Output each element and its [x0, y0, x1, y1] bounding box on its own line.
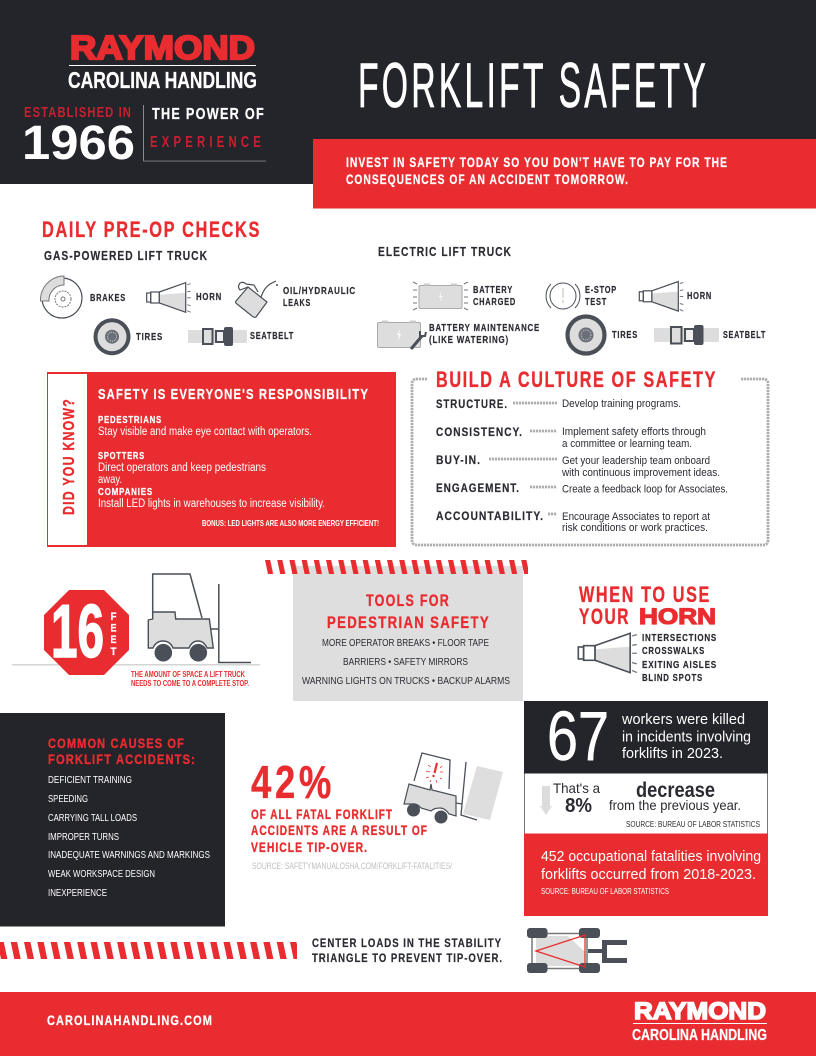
- block: 67 workers: 67: [547, 697, 609, 775]
- label: e-stop test: [585, 285, 617, 308]
- panel: did you know: [48, 372, 396, 546]
- icon: oil can: [236, 281, 278, 317]
- caption: stopping distance: NEEDS TO COME TO A COMPLETE STOP.: [131, 679, 249, 688]
- stopping distance graphic: [12, 574, 260, 688]
- list: horn situations: CROSSWALKS: [642, 646, 705, 657]
- banner: invest in safety: [313, 139, 816, 208]
- list: causes: INADEQUATE WARNINGS AND MARKINGS: [48, 850, 210, 861]
- block: 67 workers: forklifts in 2023.: [622, 746, 723, 762]
- stop sign: 16 feet: E: [110, 622, 116, 634]
- list: causes: IMPROPER TURNS: [48, 832, 119, 843]
- established in 1966 badge: THE POWER OF: [152, 106, 265, 123]
- hazard stripes top: [265, 560, 528, 574]
- label: oil/hydraulic leaks: OIL/HYDRAULIC: [283, 286, 356, 297]
- block: 67 workers: [524, 697, 768, 775]
- row: structure: Develop training programs.: [562, 398, 681, 410]
- footer logo: CAROLINA HANDLING: [632, 1027, 767, 1044]
- list: tools: BARRIERS • SAFETY MIRRORS: [343, 657, 468, 668]
- icon: horn: [578, 633, 637, 673]
- heading: common causes: [48, 736, 196, 767]
- icon: e-stop: [546, 283, 580, 309]
- chain border: [412, 379, 768, 545]
- established in 1966 badge: ESTABLISHED IN: [24, 105, 132, 121]
- text: tip-over statement: VEHICLE TIP-OVER.: [251, 840, 368, 855]
- number: 42%: 42%: [251, 756, 335, 808]
- row: engagement: ENGAGEMENT.: [436, 481, 520, 495]
- label: battery maintenance: BATTERY MAINTENANCE: [429, 323, 540, 334]
- row: buy-in: with continuous improvement ideas.: [561, 467, 720, 479]
- row: consistency: Implement safety efforts through: [562, 426, 706, 438]
- panel: when to use your horn: [578, 582, 717, 684]
- text: spotters: Direct operators and keep pedestrians: [98, 462, 266, 474]
- footer logo: RAYMOND: [634, 998, 766, 1025]
- heading: common causes: COMMON CAUSES OF: [48, 736, 185, 751]
- list: causes: [48, 775, 210, 899]
- row: engagement: [436, 481, 728, 496]
- text: spotters: away.: [98, 474, 122, 486]
- caption: stopping distance: [131, 670, 249, 688]
- label: horn: HORN: [687, 291, 712, 302]
- row: consistency: CONSISTENCY.: [436, 425, 523, 439]
- label: brakes: BRAKES: [90, 293, 126, 304]
- list: causes: WEAK WORKSPACE DESIGN: [48, 869, 155, 880]
- footer url: CAROLINAHANDLING.COM: [47, 1013, 213, 1028]
- heading: tools: TOOLS FOR: [366, 591, 450, 610]
- row: buy-in: [436, 453, 720, 479]
- list: horn situations: [642, 633, 717, 684]
- footer: [0, 992, 816, 1056]
- stat: 42 percent tip-over: [251, 753, 503, 871]
- established in 1966 badge: EXPERIENCE: [150, 134, 265, 151]
- icon: forklift: [148, 574, 251, 662]
- list: causes: DEFICIENT TRAINING: [48, 775, 132, 786]
- label: horn: HORN: [196, 292, 222, 303]
- text: center loads: CENTER LOADS IN THE STABILITY: [312, 938, 502, 950]
- heading: build a culture: BUILD A CULTURE OF SAFETY: [436, 367, 717, 392]
- heading: when to use your horn: WHEN TO USE: [579, 582, 711, 607]
- list: horn situations: INTERSECTIONS: [642, 633, 717, 644]
- established in 1966 badge: [22, 105, 266, 170]
- label: battery maintenance: [429, 323, 540, 346]
- row: accountability: [436, 509, 710, 534]
- text: center loads: [312, 938, 503, 965]
- label: battery charged: [473, 285, 516, 308]
- icon: stability triangle: [527, 928, 627, 973]
- subheading: electric: ELECTRIC LIFT TRUCK: [378, 244, 512, 259]
- icon: tipping forklift: [404, 753, 503, 824]
- heading: when to use your horn: [579, 582, 716, 629]
- label: oil/hydraulic leaks: [283, 286, 356, 309]
- row: accountability: ACCOUNTABILITY.: [436, 509, 544, 523]
- list: causes: CARRYING TALL LOADS: [48, 813, 137, 824]
- list: tools: [302, 638, 510, 687]
- source: SOURCE: SAFETYMANUALOSHA.COM/FORKLIFT-FATALITIES/: [252, 861, 452, 871]
- header background: [0, 0, 816, 184]
- block: 8 percent decrease: That's a: [553, 780, 600, 796]
- list: causes: INEXPERIENCE: [48, 888, 107, 899]
- row: consistency: [436, 425, 706, 450]
- caption: stopping distance: THE AMOUNT OF SPACE A LIFT TRUCK: [131, 670, 245, 679]
- heading: tools: [327, 591, 490, 632]
- footer logo: [632, 998, 767, 1044]
- heading: common causes: FORKLIFT ACCIDENTS:: [48, 752, 196, 767]
- text: pedestrians: PEDESTRIANS: [98, 414, 162, 426]
- list: tools: MORE OPERATOR BREAKS • FLOOR TAPE: [322, 638, 489, 649]
- established in 1966 badge: 1966: [22, 117, 135, 170]
- heading: safety is everyone's responsibility: SAFETY IS EVERYONE'S RESPONSIBILITY: [98, 387, 369, 403]
- panel: tools for pedestrian safety: [293, 566, 523, 701]
- logo: Raymond Carolina Handling: [68, 30, 257, 93]
- panel: electric lift truck: [378, 244, 766, 354]
- logo: Raymond Carolina Handling: CAROLINA HANDLING: [68, 67, 257, 93]
- block: 8 percent decrease: SOURCE: BUREAU OF LABOR STATISTICS: [626, 820, 760, 829]
- icon: seatbelt: [188, 327, 247, 346]
- text: companies: [98, 486, 325, 510]
- list: causes: SPEEDING: [48, 794, 88, 805]
- row: buy-in: BUY-IN.: [436, 453, 481, 467]
- banner: invest in safety: CONSEQUENCES OF AN ACCIDENT TOMORROW.: [346, 172, 629, 187]
- panel: gas-powered lift truck: [40, 248, 356, 353]
- block: 8 percent decrease: decrease: [636, 779, 715, 802]
- label: battery charged: BATTERY: [473, 285, 513, 296]
- heading: when to use your horn: HORN: [639, 604, 716, 629]
- text: tip-over statement: OF ALL FATAL FORKLIFT: [251, 807, 393, 822]
- text: companies: COMPANIES: [98, 486, 153, 498]
- icon: brakes: [40, 276, 82, 318]
- block: 67 workers: workers were killed: [621, 712, 745, 728]
- text: pedestrians: [98, 414, 312, 438]
- row: accountability: risk conditions or work practices.: [562, 522, 708, 534]
- panel: common causes: [0, 713, 225, 926]
- text: companies: Install LED lights in warehouses to increase visibility.: [98, 498, 325, 510]
- block: 8 percent decrease: 8%: [565, 795, 592, 817]
- row: engagement: Create a feedback loop for Associates.: [562, 484, 728, 496]
- ground line: [12, 664, 260, 666]
- row: buy-in: Get your leadership team onboard: [562, 455, 710, 467]
- stop sign: 16 feet: F: [110, 611, 117, 623]
- stop sign: 16 feet: T: [110, 646, 117, 658]
- logo: Raymond Carolina Handling: RAYMOND: [70, 30, 255, 67]
- text: spotters: [98, 450, 266, 486]
- subheading: gas-powered: GAS-POWERED LIFT TRUCK: [44, 248, 208, 263]
- row: structure: [436, 397, 681, 411]
- heading: tools: PEDESTRIAN SAFETY: [327, 613, 490, 632]
- row: consistency: a committee or learning team.: [562, 438, 692, 450]
- stop sign: 16 feet: E: [110, 634, 116, 646]
- label: tires: TIRES: [136, 332, 163, 343]
- note: bonus: BONUS: LED LIGHTS ARE ALSO MORE ENERGY EFFICIENT!: [202, 519, 379, 528]
- row: structure: STRUCTURE.: [436, 397, 508, 411]
- icon: battery charged: [413, 282, 468, 310]
- label: seatbelt: SEATBELT: [723, 330, 766, 341]
- list: tools: WARNING LIGHTS ON TRUCKS • BACKUP ALARMS: [302, 676, 510, 687]
- icon: tire: [96, 320, 128, 353]
- text: spotters: SPOTTERS: [98, 450, 145, 462]
- list: horn situations: EXITING AISLES: [642, 660, 717, 671]
- list: horn situations: BLIND SPOTS: [642, 673, 703, 684]
- text: tip-over statement: [251, 807, 428, 855]
- hazard stripes bottom: [0, 942, 297, 959]
- icon: seatbelt: [654, 325, 719, 345]
- panel: build a culture of safety: [412, 367, 768, 545]
- row: accountability: Encourage Associates to report at: [562, 511, 710, 523]
- block: 452 fatalities: [524, 834, 768, 916]
- block: 8 percent decrease: from the previous year.: [609, 797, 741, 813]
- icon: tire: [568, 316, 604, 354]
- heading: when to use your horn: YOUR: [579, 604, 630, 629]
- icon: battery maintenance: [378, 320, 426, 349]
- label: e-stop test: E-STOP: [585, 285, 617, 296]
- text: tip-over statement: ACCIDENTS ARE A RESULT OF: [251, 823, 428, 838]
- text: center loads: TRIANGLE TO PREVENT TIP-OVER.: [312, 953, 503, 965]
- block: 8 percent decrease: [540, 779, 760, 829]
- block: 452 fatalities: 452 occupational fatalities involving: [541, 848, 761, 865]
- panel: fatalities statistics: [524, 697, 768, 916]
- icon: horn: [147, 283, 191, 312]
- heading: daily pre-op checks: DAILY PRE-OP CHECKS: [42, 217, 261, 242]
- stop sign: 16 feet: 16: [51, 589, 104, 673]
- label: tires: TIRES: [612, 330, 638, 341]
- label: seatbelt: SEATBELT: [250, 331, 294, 342]
- label: battery maintenance: (LIKE WATERING): [429, 335, 509, 346]
- block: 452 fatalities: forklifts occurred from 2018-2023.: [541, 866, 756, 883]
- vertical label: did you know: DID YOU KNOW?: [61, 398, 78, 515]
- label: battery charged: CHARGED: [473, 297, 516, 308]
- label: oil/hydraulic leaks: LEAKS: [283, 298, 311, 309]
- text: pedestrians: Stay visible and make eye contact with operators.: [98, 426, 312, 438]
- icon: horn: [639, 282, 683, 311]
- label: e-stop test: TEST: [585, 297, 607, 308]
- block: 452 fatalities: SOURCE: BUREAU OF LABOR STATISTICS: [541, 887, 669, 896]
- block: 67 workers: in incidents involving: [622, 730, 751, 746]
